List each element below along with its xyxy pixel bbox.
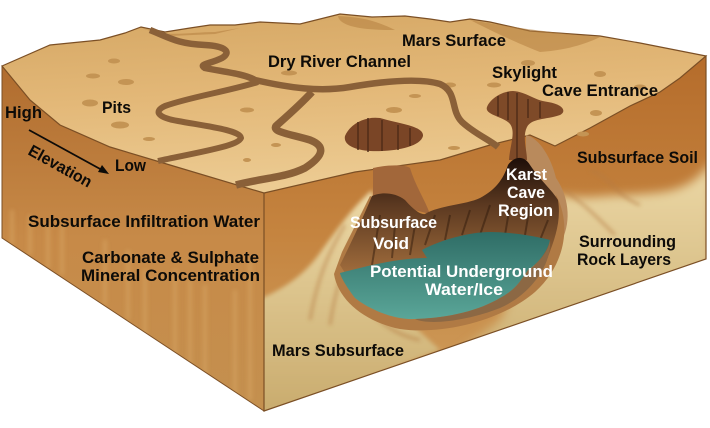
label: Subsurface Void [350,214,437,253]
label: Karst Cave Region [498,166,553,220]
label: Carbonate and Sulphate Mineral Concentration [81,249,260,285]
label: Elevation: Elevation [25,142,95,191]
label: Surrounding Rock Layers [577,233,676,269]
label: Low: Low [115,157,146,175]
label: Subsurface Void: Void [373,235,409,253]
label: Skylight: Skylight [492,64,558,82]
label: Carbonate and Sulphate Mineral Concentration: Carbonate & Sulphate [82,249,259,267]
left shaft into subsurface void [373,165,430,214]
label: Subsurface Infiltration Water: Subsurface Infiltration Water [28,213,261,231]
label: Surrounding Rock Layers: Rock Layers [577,251,671,269]
label: Potential Underground Water/Ice: Potential Underground [370,263,553,281]
label: Pits: Pits [102,99,131,117]
label: Potential Underground Water/Ice [370,263,553,299]
arrow: elevation gradient [29,130,109,174]
label: Karst Cave Region: Karst [506,166,547,184]
label: Mars Surface: Mars Surface [402,32,506,50]
label: Subsurface Void: Subsurface [350,214,437,232]
panel: Mars surface top [2,14,706,193]
label: Surrounding Rock Layers: Surrounding [579,233,676,251]
panel: right wall of the block [258,56,710,420]
label: Karst Cave Region: Cave [507,184,545,202]
label: Potential Underground Water/Ice: Water/Ice [425,281,503,299]
label: Karst Cave Region: Region [498,202,553,220]
skylight cave entrance with shaft [487,91,568,240]
label: High: High [5,104,42,122]
surface sinkhole pit [345,118,423,152]
subsurface cave void [334,158,564,330]
panel: left wall of the block [2,66,264,411]
dry river channel [150,30,498,185]
label: Subsurface Soil: Subsurface Soil [577,149,698,167]
label: Mars Subsurface: Mars Subsurface [272,342,404,360]
pits: scattered surface craters [82,58,646,162]
label: Dry River Channel: Dry River Channel [268,53,411,71]
label: Carbonate and Sulphate Mineral Concentration: Mineral Concentration [81,267,260,285]
label: Cave Entrance: Cave Entrance [542,82,658,100]
